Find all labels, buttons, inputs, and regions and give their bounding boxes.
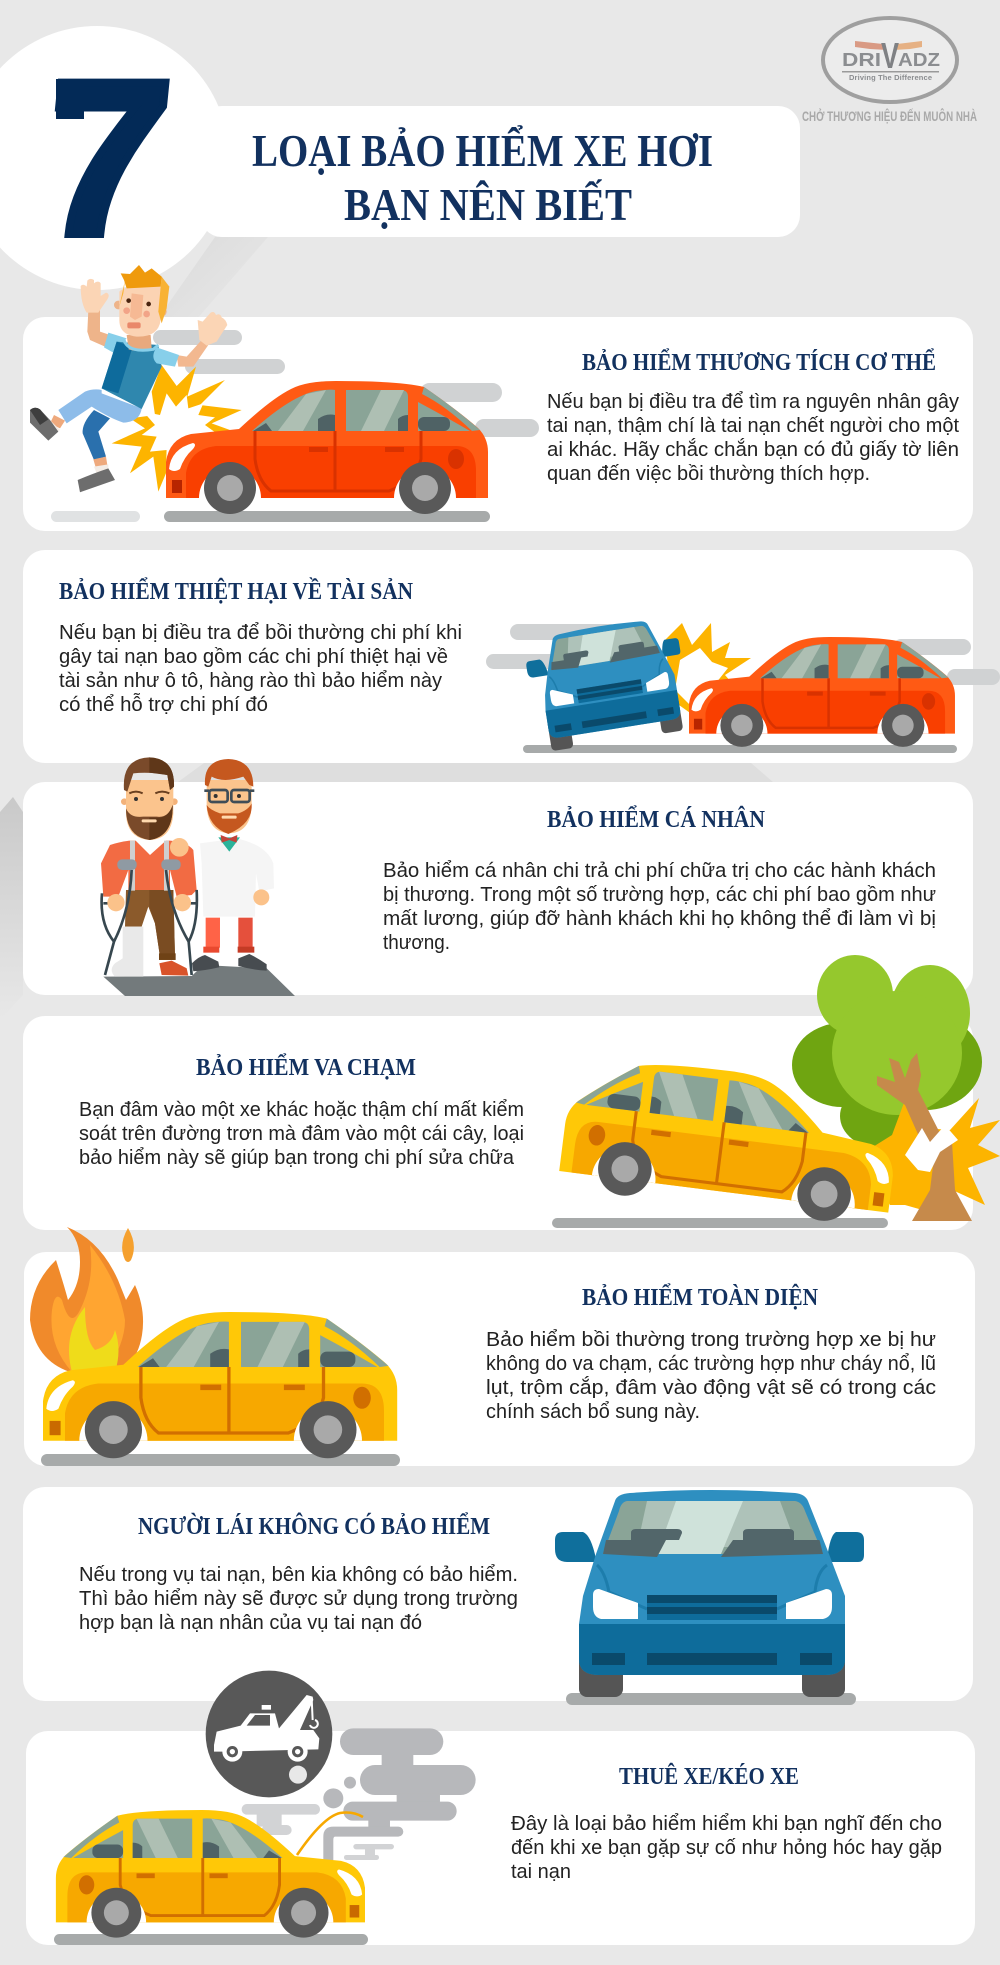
illustration: person hit by car <box>30 265 242 492</box>
title panel <box>200 106 800 237</box>
body text: lụt, trộm cắp, đâm vào động vật sẽ có trong các <box>486 1376 936 1399</box>
body text: soát trên đường trơn mà đâm vào một cái cây, loại <box>79 1123 524 1145</box>
body text: mất lương, giúp đỡ hành khách khi họ không thể đi làm vì bị <box>383 908 936 930</box>
body text: quan đến việc bồi thường thích hợp. <box>547 463 870 485</box>
heading: THUÊ XE/KÉO XE <box>619 1763 799 1790</box>
body text: không do va chạm, các trường hợp như cháy nổ, lũ <box>486 1353 936 1375</box>
icon: crash burst <box>112 365 242 492</box>
blue car <box>522 614 693 753</box>
ground <box>103 965 295 996</box>
blue car <box>555 1490 864 1697</box>
logo: V <box>881 35 899 76</box>
body text: Đây là loại bảo hiểm hiểm khi bạn nghĩ đến cho <box>511 1813 942 1835</box>
yellow car <box>557 1051 903 1229</box>
yellow car <box>56 1810 365 1938</box>
red car <box>689 637 955 747</box>
red car <box>166 381 488 514</box>
title circle <box>0 26 229 290</box>
body text: chính sách bổ sung này. <box>486 1401 700 1423</box>
icon: tow truck badge <box>206 1671 332 1797</box>
heading: BẢO HIỂM THƯƠNG TÍCH CƠ THỂ <box>582 349 936 376</box>
ground bar <box>54 1934 368 1945</box>
body text: có thể hỗ trợ chi phí đó <box>59 693 268 716</box>
icon: trunk break <box>905 1125 958 1172</box>
tree trunk <box>877 1053 972 1221</box>
body text: Bạn đâm vào một xe khác hoặc thậm chí mất kiểm <box>79 1099 524 1121</box>
ground bar <box>566 1693 856 1705</box>
smoke <box>242 1728 476 1860</box>
body text: Nếu bạn bị điều tra để tìm ra nguyên nhân gây <box>547 391 959 413</box>
man on crutches <box>101 757 197 977</box>
body text: hợp bạn là nạn nhân của vụ tai nạn đó <box>79 1612 422 1634</box>
open hood line <box>297 1812 363 1855</box>
panel: rental and towing <box>26 1731 975 1945</box>
ground bar <box>523 745 957 753</box>
logo: ADZ <box>898 50 940 70</box>
panel: bodily injury <box>23 317 973 531</box>
body text: Nếu bạn bị điều tra để bồi thường chi phí khi <box>59 622 462 644</box>
heading: BẢO HIỂM VA CHẠM <box>196 1054 416 1081</box>
title text: BẠN NÊN BIẾT <box>344 178 632 230</box>
body text: thương. <box>383 932 450 954</box>
body text: tai nạn <box>511 1861 571 1883</box>
person <box>30 265 227 492</box>
body text: Thì bảo hiểm này sẽ được sử dụng trong trường <box>79 1588 518 1610</box>
panel: comprehensive <box>24 1252 975 1466</box>
illustration: front of blue car <box>555 1490 864 1705</box>
logo <box>823 18 957 102</box>
panel: property damage <box>23 550 973 763</box>
illustration: car on fire <box>30 1227 400 1466</box>
illustration: two car crash <box>486 614 1000 753</box>
body text: gây tai nạn bao gồm các chi phí thiệt hại về <box>59 646 448 668</box>
body text: Bảo hiểm bồi thường trong trường hợp xe bị hư <box>486 1329 936 1351</box>
icon: crash burst <box>665 623 751 720</box>
panel: collision <box>23 1016 973 1230</box>
flames <box>30 1227 143 1372</box>
heading: BẢO HIỂM CÁ NHÂN <box>547 806 766 833</box>
illustration: smoke and broken down car <box>54 1671 476 1945</box>
doctor <box>192 759 274 971</box>
heading: BẢO HIỂM TOÀN DIỆN <box>582 1284 819 1311</box>
logo: Driving The Difference <box>849 73 932 82</box>
body text: ai khác. Hãy chắc chắn bạn có đủ giấy tờ liên <box>547 438 959 461</box>
title text: LOẠI BẢO HIỂM XE HƠI <box>252 124 713 176</box>
panel: personal insurance <box>23 782 973 995</box>
body text: Nếu trong vụ tai nạn, bên kia không có bảo hiểm. <box>79 1564 518 1586</box>
logo: DRI <box>842 50 881 70</box>
body text: bảo hiểm này sẽ giúp bạn trong chi phí sửa chữa <box>79 1147 515 1169</box>
big number 7: 7 <box>32 34 180 281</box>
tree canopy <box>792 955 982 1148</box>
heading: NGƯỜI LÁI KHÔNG CÓ BẢO HIỂM <box>138 1513 490 1540</box>
body text: Bảo hiểm cá nhân chi trả chi phí chữa trị cho các hành khách <box>383 860 936 882</box>
body text: đến khi xe bạn gặp sự cố như hỏng hóc hay gặp <box>511 1837 942 1859</box>
heading: BẢO HIỂM THIỆT HẠI VỀ TÀI SẢN <box>59 578 414 605</box>
body text: tài sản như ô tô, hàng rào thì bảo hiểm này <box>59 670 442 692</box>
speed streaks <box>153 330 539 437</box>
ground bar <box>41 1454 400 1466</box>
illustration: car crash into tree <box>552 955 1000 1229</box>
panel: uninsured driver <box>23 1487 973 1701</box>
ground bars panel 1 <box>51 511 490 522</box>
shadow shapes <box>0 237 773 1020</box>
streaks <box>486 624 1000 685</box>
body text: tai nạn, thậm chí là tai nạn chết người cho một <box>547 415 959 437</box>
body text: bị thương. Trong một số trường hợp, các chi phí bao gồm như <box>383 884 936 906</box>
icon: crash burst <box>868 1098 1000 1215</box>
ground bar <box>552 1218 888 1228</box>
yellow car <box>43 1312 397 1458</box>
illustration: injured man and doctor <box>101 757 295 996</box>
